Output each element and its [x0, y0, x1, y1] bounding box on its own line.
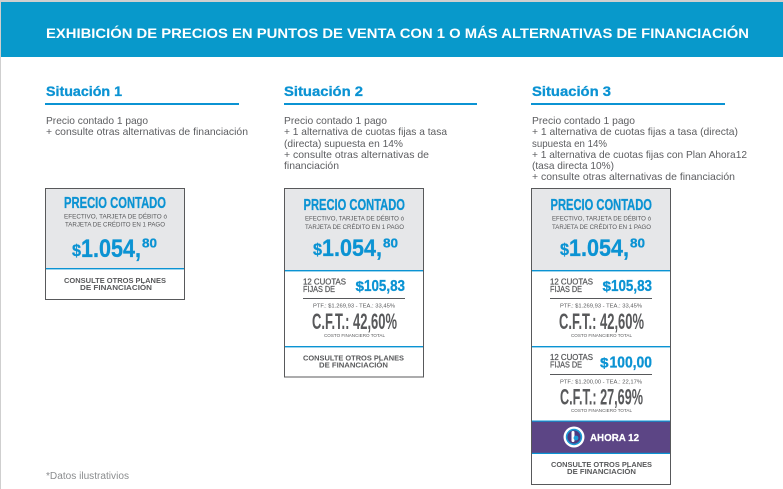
price card: situación 3: 12 CUOTAS	[550, 276, 593, 286]
price card: situación 3: COSTO FINANCIERO TOTAL	[571, 333, 633, 338]
text block: situación 1 description: + consulte otras alternativas de financiación	[46, 126, 248, 138]
price card: situación 1: $	[72, 241, 82, 260]
price card: situación 3: PTF.: $1.200,00 - TEA.: 22,17%	[560, 380, 643, 386]
text block: situación 3 description: supuesta en 14%	[532, 138, 607, 150]
price card: situación 1: 1.054,	[81, 235, 141, 263]
header banner: EXHIBICIÓN DE PRECIOS EN PUNTOS DE VENTA CON 1 O MÁS ALTERNATIVAS DE FINANCIACIÓN	[46, 24, 749, 41]
text block: situación 3 description: + consulte otras alternativas de financiación	[532, 171, 735, 183]
price card: situación 3: C.F.T.: 42,60%	[559, 309, 644, 334]
price card: situación 1: 80	[142, 236, 157, 250]
price card: situación 2: 1.054,	[322, 235, 382, 262]
price card: situación 2	[284, 188, 424, 377]
price card: situación 2: C.F.T.: 42,60%	[312, 309, 397, 334]
text block: situación 1 description: Precio contado 1 pago	[46, 115, 148, 127]
price card: situación 2: PRECIO CONTADO	[304, 197, 405, 214]
heading: situación 2: Situación 2	[284, 83, 363, 99]
header banner	[1, 2, 783, 57]
price card: situación 2: $	[313, 240, 323, 259]
text block: situación 3 description	[532, 115, 747, 183]
price card: situación 3: DE FINANCIACIÓN	[567, 467, 636, 476]
text block: situación 2 description: + consulte otras alternativas de	[284, 149, 429, 161]
price card: situación 3: C.F.T.: 27,69%	[560, 384, 643, 410]
badge: Ahora 12: AHORA 12	[590, 433, 639, 444]
panel: situación 3	[531, 83, 747, 484]
text block: situación 2 description: + 1 alternativa de cuotas fijas a tasa	[284, 126, 447, 138]
heading: situación 1: Situación 1	[46, 83, 122, 99]
footnote: *Datos ilustrativios	[46, 471, 129, 482]
price card: situación 3: 1.054,	[569, 235, 629, 262]
price card: situación 2: 105,83	[364, 278, 405, 295]
price card: situación 3: PTF.: $1.269,93 - TEA.: 33,45%	[560, 304, 643, 310]
badge: Ahora 12	[532, 420, 670, 454]
price card: situación 2: COSTO FINANCIERO TOTAL	[324, 333, 386, 338]
text block: situación 1 description	[46, 115, 248, 138]
price card: situación 1: EFECTIVO, TARJETA DE DÉBITO ó	[64, 212, 167, 220]
panel: situación 1	[45, 83, 248, 300]
price card: situación 3: CONSULTE OTROS PLANES	[551, 460, 652, 469]
price card: situación 1: CONSULTE OTROS PLANES	[64, 276, 166, 285]
price card: situación 3: $	[600, 354, 609, 370]
price card: situación 3: FIJAS DE	[550, 360, 582, 370]
price card: situación 2: 12 CUOTAS	[303, 276, 346, 286]
price card: situación 3: $	[602, 278, 611, 294]
text block: situación 3 description: + 1 alternativa de cuotas fijas a tasa (directa)	[532, 126, 738, 138]
price card: situación 1: PRECIO CONTADO	[64, 195, 166, 212]
text block: situación 2 description: financiación	[284, 160, 339, 172]
price card: situación 2: 80	[383, 236, 398, 250]
price card: situación 3: EFECTIVO, TARJETA DE DÉBITO ó	[552, 214, 651, 222]
price card: situación 2: TARJETA DE CRÉDITO EN 1 PAGO	[305, 222, 404, 231]
heading: situación 3: Situación 3	[532, 83, 611, 99]
price card: situación 3: COSTO FINANCIERO TOTAL	[571, 408, 633, 413]
price card: situación 3: 80	[630, 236, 645, 250]
price card: situación 3: TARJETA DE CRÉDITO EN 1 PAGO	[552, 222, 651, 231]
price card: situación 2: EFECTIVO, TARJETA DE DÉBITO ó	[305, 214, 404, 222]
text block: situación 2 description	[284, 115, 447, 172]
price card: situación 3: FIJAS DE	[550, 284, 582, 294]
text block: situación 3 description: (tasa directa 10%)	[532, 160, 614, 172]
price card: situación 2: $	[356, 278, 364, 294]
price card: situación 2: PTF.: $1.269,93 - TEA.: 33,45%	[313, 304, 396, 310]
text block: situación 2 description: Precio contado 1 pago	[284, 115, 387, 127]
panel: situación 2	[284, 83, 477, 377]
price card: situación 3: 105,83	[611, 278, 652, 295]
price card: situación 3: 100,00	[610, 354, 652, 372]
icon: Ahora 12 logo	[564, 426, 584, 448]
price card: situación 3: PRECIO CONTADO	[550, 197, 652, 214]
text block: situación 3 description: Precio contado 1 pago	[532, 115, 635, 127]
text block: situación 3 description: + 1 alternativa de cuotas fijas con Plan Ahora12	[532, 149, 747, 161]
price card: situación 1: DE FINANCIACIÓN	[80, 283, 152, 292]
text block: situación 2 description: (directa) supuesta en 14%	[284, 138, 403, 150]
price card: situación 1	[46, 188, 184, 300]
price card: situación 1: TARJETA DE CRÉDITO EN 1 PAGO	[65, 220, 165, 228]
price card: situación 3: 12 CUOTAS	[550, 352, 593, 362]
price card: situación 2: FIJAS DE	[303, 284, 335, 294]
price card: situación 3	[532, 188, 670, 484]
price card: situación 2: DE FINANCIACIÓN	[319, 360, 388, 370]
price card: situación 3: $	[560, 240, 570, 259]
price card: situación 2: CONSULTE OTROS PLANES	[303, 354, 404, 362]
